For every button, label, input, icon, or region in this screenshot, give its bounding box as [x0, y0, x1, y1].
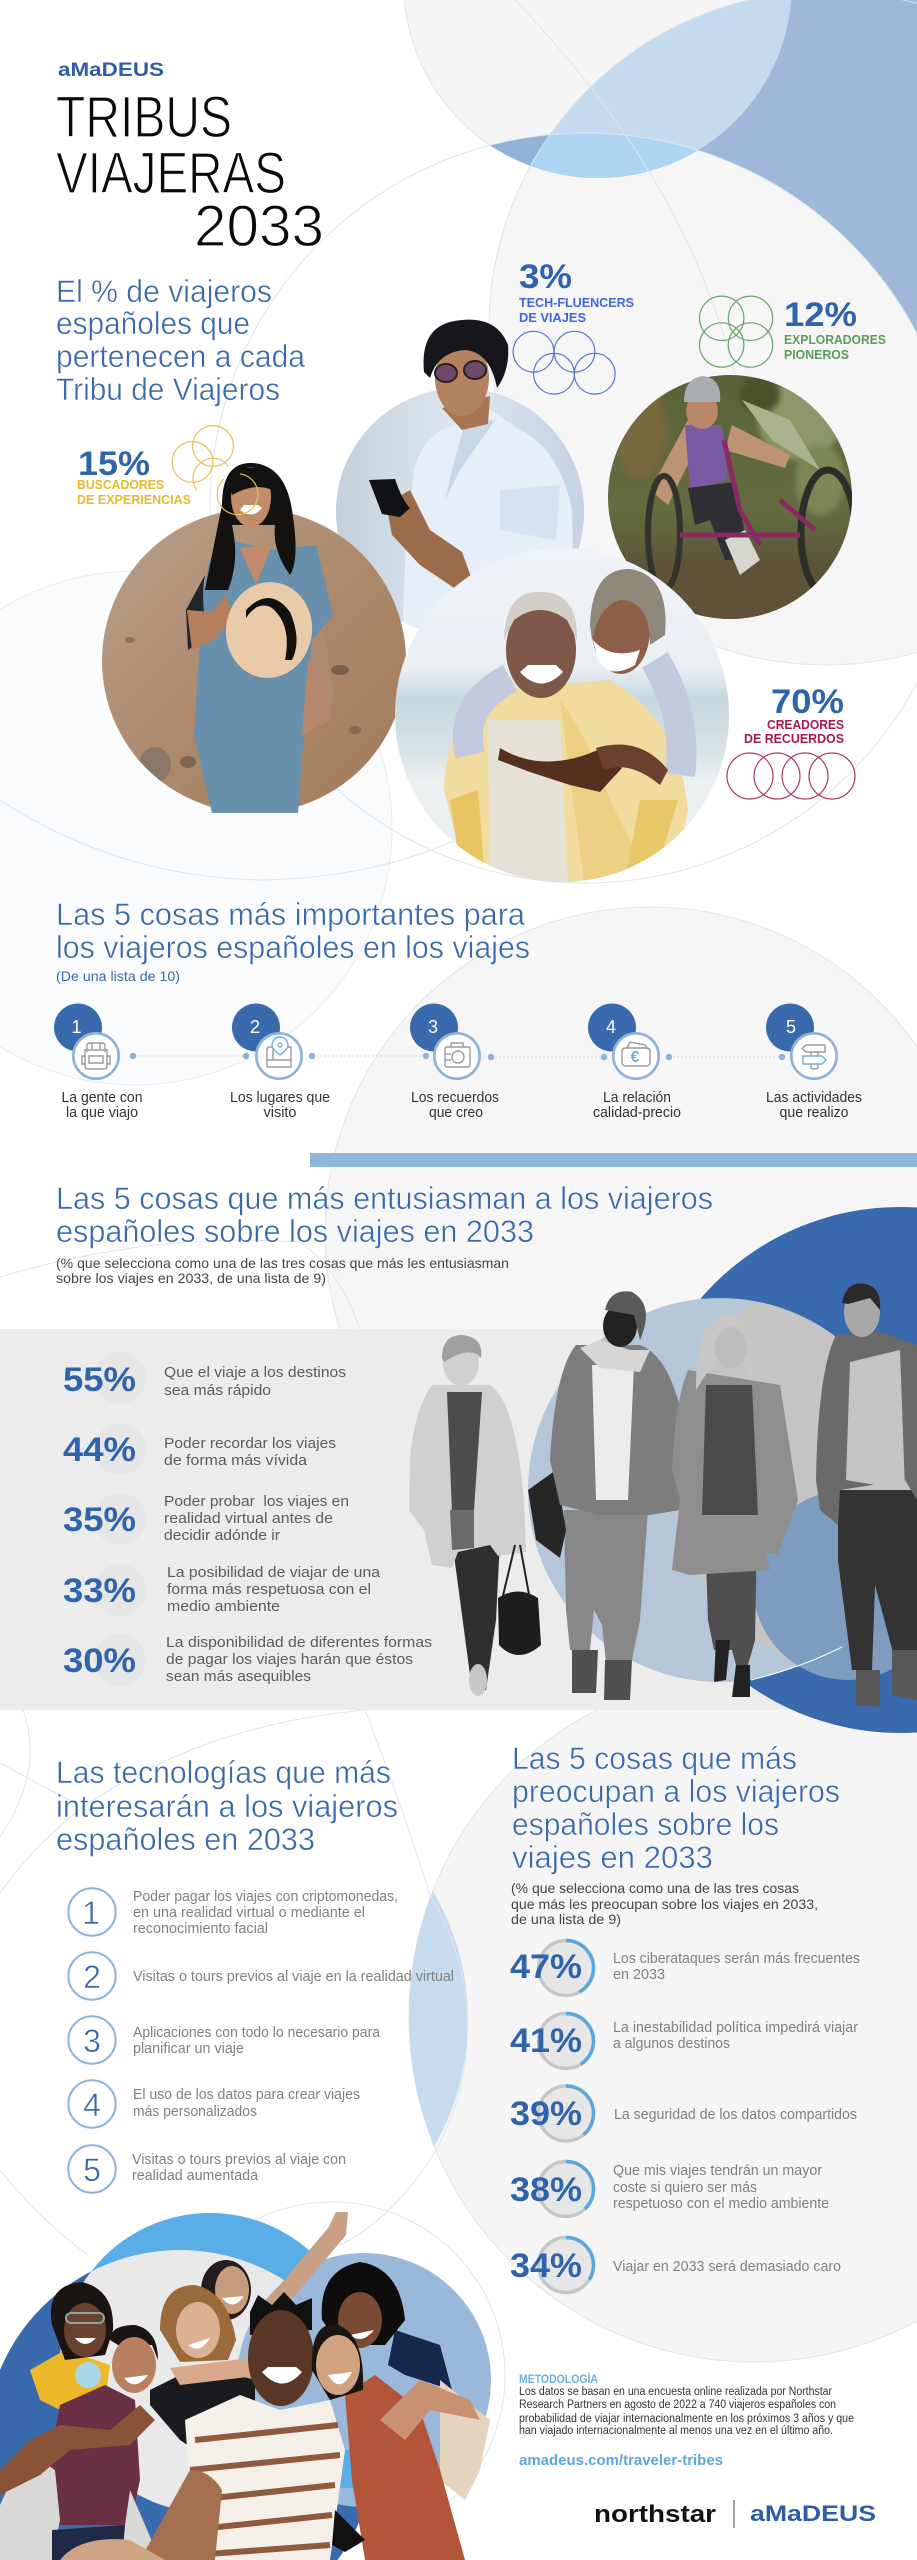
worries list — [510, 1940, 860, 2292]
photo: man with phone — [336, 320, 584, 660]
heading: tribes share: Tribu de Viajeros — [56, 371, 280, 407]
technology 3 — [68, 2016, 381, 2064]
worry 38%: respetuoso con el medio ambiente — [613, 2196, 829, 2212]
stat: exploradores pioneros 12%: 12% — [784, 296, 857, 334]
stat 30%: La disponibilidad de diferentes formas — [166, 1635, 432, 1651]
connectors between steps — [130, 1053, 785, 1060]
worry 41%: a algunos destinos — [613, 2036, 730, 2052]
technology 1: reconocimiento facial — [133, 1921, 268, 1937]
photo: smiling couple — [395, 548, 729, 890]
stat 30% — [63, 1634, 432, 1686]
logos: northstar and amadeus: aMaDEUS — [750, 2501, 876, 2526]
photo: woman with hat — [102, 463, 406, 813]
step 4: € — [631, 1049, 640, 1066]
title: TRIBUS — [56, 85, 232, 150]
panel: grey band — [0, 1329, 917, 1710]
logos: northstar and amadeus: northstar — [594, 2501, 716, 2528]
stat: tech-fluencers 3%: DE VIAJES — [519, 310, 586, 325]
heading: excitement: Las 5 cosas que más entusiasman a los viajeros — [56, 1180, 713, 1216]
title — [56, 85, 324, 259]
step 5: Las actividades — [766, 1090, 862, 1106]
technology 5: Visitas o tours previos al viaje con — [132, 2152, 346, 2168]
stat: creadores de recuerdos 70%: DE RECUERDOS — [744, 731, 844, 746]
divider bar — [310, 1153, 917, 1167]
heading: top 5 things — [56, 896, 530, 984]
heading: worries: preocupan a los viajeros — [512, 1773, 840, 1809]
heading: excitement: (% que selecciona como una de las tres cosas que más les entusiasman — [56, 1255, 509, 1271]
worry 34%: 34% — [510, 2247, 582, 2285]
decorative blue circles behind travellers — [528, 1207, 917, 1733]
background circles: lower cluster — [0, 1672, 917, 2548]
friend in red dress and navy top — [312, 2262, 490, 2560]
stat 55% — [63, 1352, 346, 1404]
step 2: Los lugares que — [230, 1090, 330, 1106]
friend with raised arm — [201, 2212, 348, 2320]
heading: worries: que más les preocupan sobre los viajes en 2033, — [511, 1896, 818, 1912]
stat 30%: 30% — [63, 1642, 136, 1680]
stat: tech-fluencers 3%: TECH-FLUENCERS — [519, 295, 634, 310]
title: VIAJERAS — [56, 141, 286, 206]
stat 33%: forma más respetuosa con el — [167, 1582, 371, 1598]
worry 47%: Los ciberataques serán más frecuentes — [613, 1951, 860, 1967]
step 3: Los recuerdos — [411, 1090, 499, 1106]
friend with curly hair — [150, 2285, 255, 2445]
heading: worries: de una lista de 9) — [511, 1911, 621, 1927]
step 3 — [410, 1004, 499, 1121]
technology 4: más personalizados — [133, 2104, 257, 2120]
worry 39%: La seguridad de los datos compartidos — [614, 2107, 857, 2123]
stat 44% — [63, 1423, 336, 1475]
stat: exploradores pioneros 12%: PIONEROS — [784, 347, 849, 362]
step 4: calidad-precio — [593, 1105, 681, 1121]
heading: worries: Las 5 cosas que más — [512, 1740, 797, 1776]
friend with glasses and yellow top — [30, 2282, 113, 2410]
link: amadeus.com/traveler-tribes — [519, 2453, 723, 2469]
worry 41%: La inestabilidad política impedirá viajar — [613, 2020, 858, 2036]
technology 4 — [68, 2080, 360, 2128]
worry 41% — [510, 2014, 858, 2068]
step 2 — [230, 1004, 330, 1121]
technology 5: 5 — [83, 2152, 101, 2188]
stat 44%: de forma más vívida — [164, 1453, 308, 1469]
stat 33%: 33% — [63, 1572, 136, 1610]
heading: excitement — [56, 1180, 713, 1286]
worry 38% — [510, 2162, 829, 2216]
worry 47% — [510, 1940, 860, 1996]
heading: top 5 things: (De una lista de 10) — [56, 968, 180, 984]
traveller: woman with coat — [409, 1335, 541, 1696]
step 1: 1 — [71, 1017, 82, 1037]
logos: northstar and amadeus — [594, 2500, 876, 2528]
technology 5 — [68, 2145, 346, 2193]
technology 1 — [68, 1888, 398, 1937]
stat: creadores de recuerdos 70%: 70% — [771, 683, 844, 721]
technology 1: 1 — [82, 1895, 100, 1931]
technology 3: planificar un viaje — [133, 2041, 244, 2057]
step 2: visito — [264, 1105, 296, 1121]
heading: top 5 things: Las 5 cosas más importantes para — [56, 896, 525, 932]
heading: technologies: Las tecnologías que más — [56, 1754, 391, 1790]
stat 44%: 44% — [63, 1431, 136, 1469]
step 5: 5 — [786, 1017, 796, 1037]
photo: group of friends — [0, 2212, 491, 2560]
heading: excitement: españoles sobre los viajes en 2033 — [56, 1213, 534, 1249]
technology 4: El uso de los datos para crear viajes — [133, 2087, 360, 2103]
friend in maroon shirt — [0, 2325, 160, 2560]
technology 2 — [68, 1952, 454, 2000]
logo: amadeus: aMaDEUS — [58, 60, 164, 81]
stat 30%: sean más asequibles — [166, 1669, 311, 1685]
technology 1: en una realidad virtual o mediante el — [133, 1905, 365, 1921]
stat 33% — [63, 1564, 381, 1616]
step 3: que creo — [429, 1105, 483, 1121]
stat: buscadores de experiencias 15%: 15% — [78, 445, 150, 483]
stat: tech-fluencers 3%: 3% — [519, 258, 572, 296]
excitement stats list — [63, 1352, 432, 1686]
technology 2: Visitas o tours previos al viaje en la realidad virtual — [133, 1969, 454, 1985]
methodology: probabilidad de viajar internacionalmente en los próximos 3 años y que — [519, 2413, 854, 2425]
stat: exploradores pioneros 12%: EXPLORADORES — [784, 332, 886, 347]
worry 41%: 41% — [510, 2022, 582, 2060]
stat 30%: de pagar los viajes harán que éstos — [166, 1652, 413, 1668]
stat: tech-fluencers 3% — [513, 258, 634, 394]
step 5 — [766, 1004, 862, 1121]
worry 34% — [510, 2238, 841, 2292]
stat 35%: Poder probar los viajes en — [164, 1494, 349, 1510]
worry 47%: en 2033 — [613, 1967, 665, 1983]
stat: buscadores de experiencias 15%: DE EXPERIENCIAS — [77, 492, 191, 507]
worry 39% — [510, 2086, 857, 2141]
worry 38%: coste si quiero ser más — [613, 2180, 757, 2196]
stat: buscadores de experiencias 15% — [77, 445, 191, 507]
photo: four travellers in grayscale — [409, 1283, 917, 1707]
heading: worries: viajes en 2033 — [512, 1839, 713, 1875]
stat 33%: medio ambiente — [167, 1599, 280, 1615]
step 4 — [588, 1004, 681, 1121]
icon: yellow rings — [172, 426, 258, 515]
step 4: La relación — [603, 1090, 671, 1106]
methodology: han viajado internacionalmente al menos una vez en el último año. — [519, 2425, 833, 2437]
methodology: Research Partners en agosto de 2022 a 740 viajeros españoles con — [519, 2399, 836, 2411]
heading: tribes share: El % de viajeros — [56, 273, 272, 309]
traveller: blonde woman — [672, 1313, 798, 1697]
technology 3: Aplicaciones con todo lo necesario para — [133, 2025, 381, 2041]
step 2: 2 — [250, 1017, 260, 1037]
heading: tribes share — [56, 273, 305, 407]
stat 55%: 55% — [63, 1361, 136, 1399]
heading: worries: (% que selecciona como una de las tres cosas — [511, 1880, 799, 1896]
technology 4: 4 — [83, 2087, 101, 2123]
worry 38%: Que mis viajes tendrán un mayor — [613, 2163, 822, 2179]
heading: technologies: interesarán a los viajeros — [56, 1788, 398, 1824]
step 1: la que viajo — [66, 1105, 138, 1121]
traveller: man in hoodie — [816, 1283, 917, 1707]
background circles: top cluster — [0, 0, 917, 1085]
stat 35%: decidir adónde ir — [164, 1528, 280, 1544]
heading: tribes share: españoles que — [56, 305, 250, 341]
technology 2: 2 — [83, 1959, 101, 1995]
heading: technologies: españoles en 2033 — [56, 1821, 315, 1857]
worry 34%: Viajar en 2033 será demasiado caro — [613, 2259, 841, 2275]
stat: creadores de recuerdos 70% — [727, 683, 855, 799]
worry 39%: 39% — [510, 2095, 582, 2133]
stat: exploradores pioneros 12% — [700, 296, 886, 367]
stat: buscadores de experiencias 15%: BUSCADORES — [77, 477, 164, 492]
technology 1: Poder pagar los viajes con criptomonedas, — [133, 1889, 398, 1905]
stat 35%: realidad virtual antes de — [164, 1511, 333, 1527]
technology 5: realidad aumentada — [132, 2168, 259, 2184]
heading: excitement: sobre los viajes en 2033, de una lista de 9) — [56, 1270, 326, 1286]
step 1: La gente con — [62, 1090, 142, 1106]
step 5: que realizo — [780, 1105, 848, 1121]
technology 3: 3 — [83, 2023, 101, 2059]
blue background circles — [0, 2213, 491, 2560]
methodology: METODOLOGÍA — [519, 2373, 598, 2386]
friend in striped shirt taking selfie — [60, 2292, 345, 2560]
heading: tribes share: pertenecen a cada — [56, 338, 305, 374]
technology list — [68, 1888, 454, 2193]
stat 44%: Poder recordar los viajes — [164, 1436, 336, 1452]
methodology: Los datos se basan en una encuesta online realizada por Northstar — [519, 2386, 832, 2398]
stat 55%: sea más rápido — [164, 1383, 271, 1399]
heading: top 5 things: los viajeros españoles en los viajes — [56, 929, 530, 965]
worry 47%: 47% — [510, 1948, 582, 1986]
photo: hand-cyclist — [608, 375, 855, 640]
stat 35% — [63, 1493, 349, 1545]
worry 38%: 38% — [510, 2171, 582, 2209]
traveller: man with beanie — [528, 1291, 690, 1700]
stat: creadores de recuerdos 70%: CREADORES — [767, 717, 844, 732]
title: 2033 — [194, 194, 324, 259]
heading: worries: españoles sobre los — [512, 1806, 779, 1842]
heading: worries — [511, 1740, 840, 1927]
step 4: 4 — [606, 1017, 616, 1037]
step 3: 3 — [428, 1017, 438, 1037]
step 1 — [54, 1004, 142, 1121]
stat 33%: La posibilidad de viajar de una — [167, 1565, 381, 1581]
heading: technologies — [56, 1754, 398, 1857]
background circles: middle cluster — [0, 907, 917, 1557]
stat 55%: Que el viaje a los destinos — [164, 1365, 346, 1381]
stat 35%: 35% — [63, 1501, 136, 1539]
methodology — [519, 2373, 854, 2437]
